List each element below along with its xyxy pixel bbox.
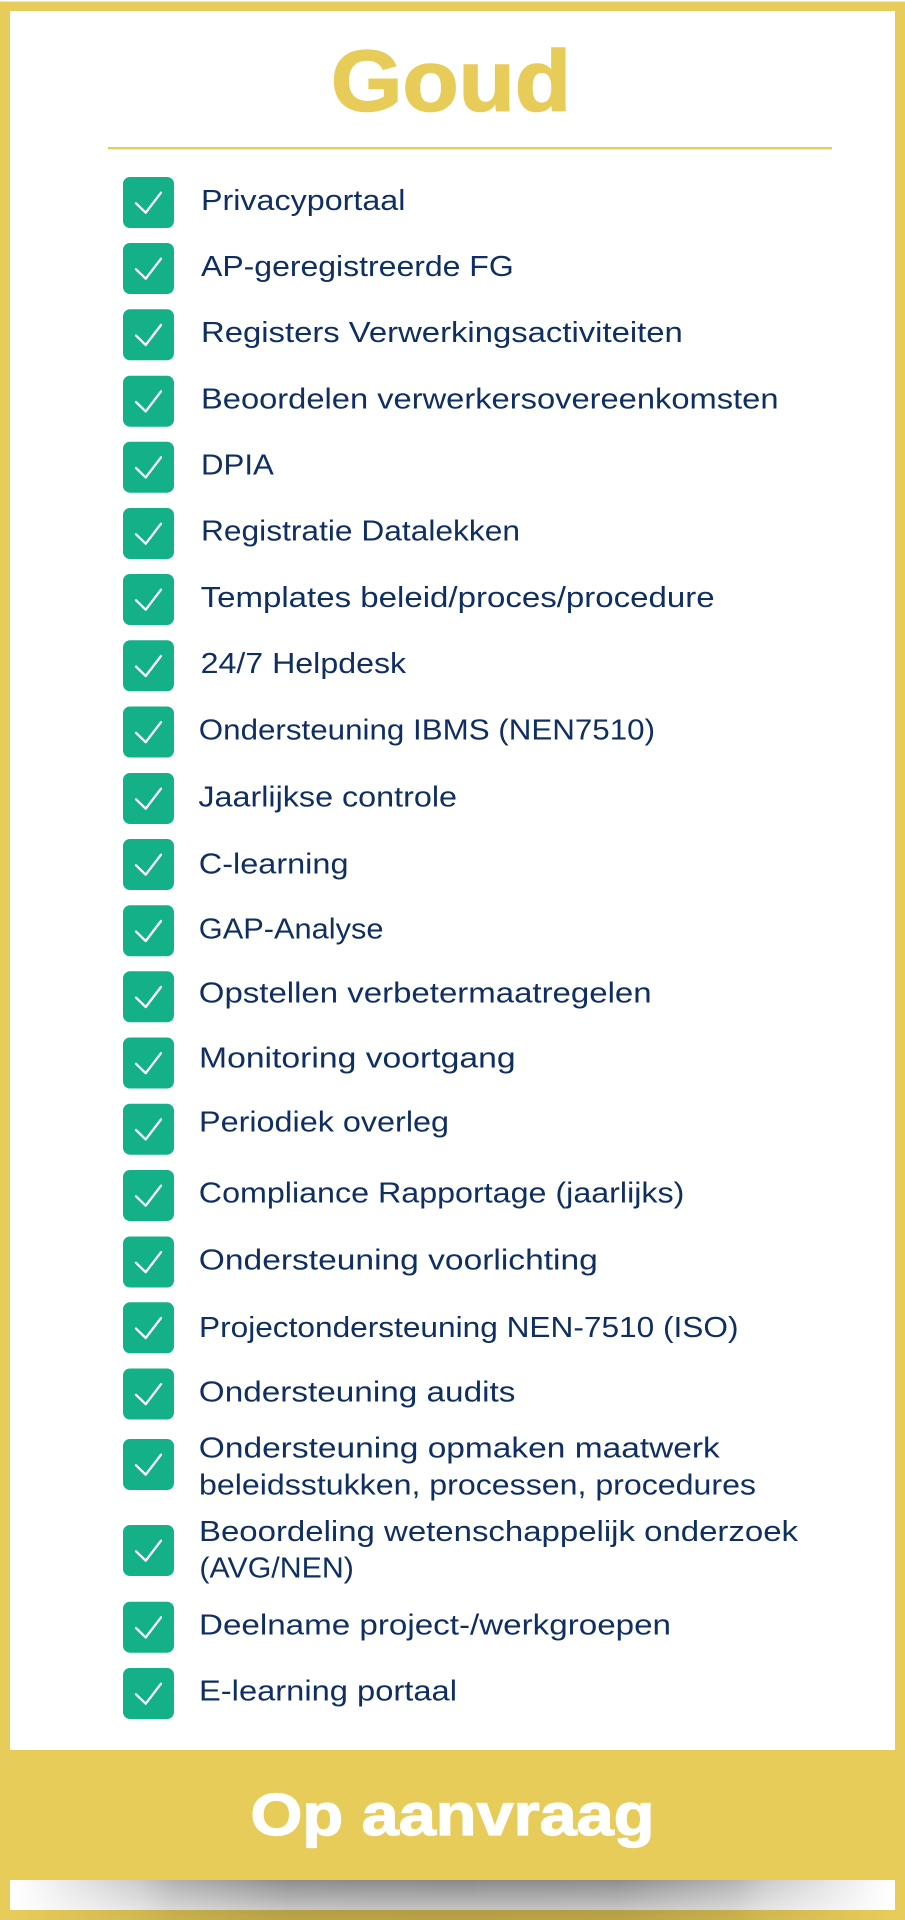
- item: Projectondersteuning NEN-7510 (ISO): [123, 1302, 738, 1353]
- item: Beoordelen verwerkersovereenkomsten: [123, 376, 778, 427]
- item: Registers Verwerkingsactiviteiten: Registers Verwerkingsactiviteiten: [201, 317, 683, 349]
- item: Ondersteuning audits: [123, 1368, 515, 1420]
- title: Goud: Goud: [331, 34, 571, 130]
- item: Ondersteuning voorlichting: [123, 1236, 598, 1288]
- item: Compliance Rapportage (jaarlijks): [123, 1170, 684, 1221]
- item: Ondersteuning opmaken maatwerk beleidsstukken: beleidsstukken, processen, procedures: [199, 1469, 756, 1501]
- item: DPIA: [123, 442, 275, 493]
- item: Beoordelen verwerkersovereenkomsten: Beoordelen verwerkersovereenkomsten: [201, 383, 778, 415]
- item: Monitoring voortgang: [123, 1038, 516, 1088]
- item: C-learning: [123, 839, 348, 890]
- item: Opstellen verbetermaatregelen: Opstellen verbetermaatregelen: [199, 978, 652, 1010]
- item: Ondersteuning IBMS (NEN7510): [123, 706, 655, 758]
- item: Registratie Datalekken: [123, 508, 520, 559]
- item: AP-geregistreerde FG: [123, 243, 514, 294]
- item: Beoordeling wetenschappelijk onderzoek: Beoordeling wetenschappelijk onderzoek: [199, 1516, 799, 1548]
- item: Beoordeling wetenschappelijk onderzoek: (AVG/NEN): [199, 1553, 354, 1585]
- item: Privacyportaal: [123, 177, 405, 228]
- item: Privacyportaal: Privacyportaal: [201, 185, 405, 217]
- item: Jaarlijkse controle: Jaarlijkse controle: [198, 782, 457, 814]
- item: Opstellen verbetermaatregelen: [123, 971, 652, 1022]
- divider under title: [108, 147, 832, 149]
- drop shadow under price band: [0, 1880, 905, 1920]
- item: Deelname project-/werkgroepen: Deelname project-/werkgroepen: [199, 1609, 671, 1641]
- item: Ondersteuning IBMS (NEN7510): Ondersteuning IBMS (NEN7510): [199, 714, 655, 746]
- item: Registers Verwerkingsactiviteiten: [123, 309, 683, 360]
- item: 24/7 Helpdesk: [123, 640, 407, 691]
- checklist: [123, 177, 799, 1719]
- item: Ondersteuning opmaken maatwerk beleidsstukken: Ondersteuning opmaken maatwerk: [199, 1433, 720, 1465]
- item: Ondersteuning audits: Ondersteuning audits: [199, 1377, 515, 1409]
- item: E-learning portaal: [123, 1668, 457, 1719]
- item: 24/7 Helpdesk: 24/7 Helpdesk: [201, 648, 407, 680]
- item: Templates beleid/proces/procedure: Templates beleid/proces/procedure: [201, 582, 715, 614]
- item: Beoordeling wetenschappelijk onderzoek: [123, 1516, 799, 1585]
- item: Periodiek overleg: [123, 1104, 449, 1155]
- item: Registratie Datalekken: Registratie Datalekken: [201, 516, 520, 548]
- item: DPIA: DPIA: [201, 449, 275, 481]
- item: GAP-Analyse: GAP-Analyse: [199, 913, 384, 945]
- item: Deelname project-/werkgroepen: [123, 1602, 671, 1653]
- item: Projectondersteuning NEN-7510 (ISO): Projectondersteuning NEN-7510 (ISO): [199, 1312, 738, 1344]
- item: Ondersteuning voorlichting: Ondersteuning voorlichting: [199, 1245, 598, 1277]
- item: Periodiek overleg: Periodiek overleg: [199, 1107, 449, 1139]
- item: E-learning portaal: E-learning portaal: [199, 1676, 457, 1708]
- item: GAP-Analyse: [123, 905, 384, 956]
- item: Ondersteuning opmaken maatwerk beleidsstukken: [123, 1433, 756, 1501]
- item: Monitoring voortgang: Monitoring voortgang: [199, 1043, 516, 1075]
- item: AP-geregistreerde FG: AP-geregistreerde FG: [201, 251, 514, 283]
- price text: Op aanvraag: Op aanvraag: [250, 1782, 654, 1848]
- item: Templates beleid/proces/procedure: [123, 574, 715, 625]
- item: Jaarlijkse controle: [123, 773, 457, 824]
- item: Compliance Rapportage (jaarlijks): Compliance Rapportage (jaarlijks): [199, 1178, 684, 1210]
- item: C-learning: C-learning: [199, 848, 348, 880]
